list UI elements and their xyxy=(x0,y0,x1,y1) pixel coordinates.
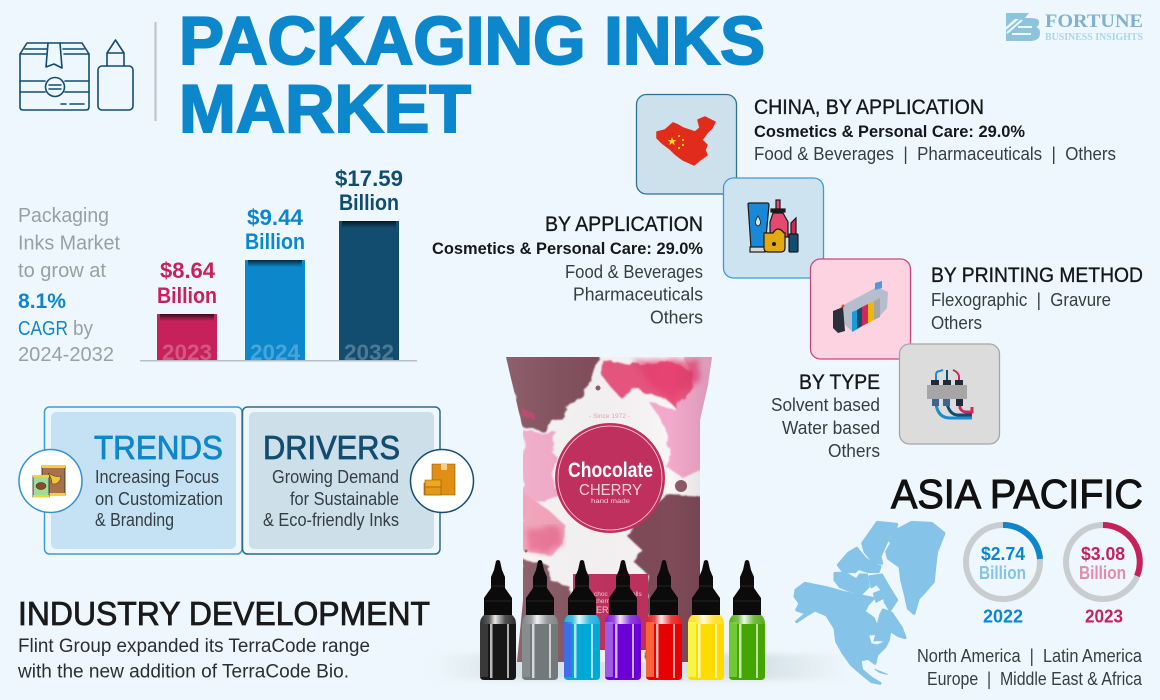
icon: cosmetics xyxy=(748,200,798,252)
bar: 2032: $17.59 xyxy=(335,166,403,191)
panel: trends xyxy=(44,407,242,554)
logo: Fortune Business Insights xyxy=(1006,11,1143,43)
title: PACKAGING INKS xyxy=(179,3,765,79)
icon: ink connectors xyxy=(927,370,972,418)
chart: donut 2023: Billion xyxy=(1079,562,1126,583)
text: trends description xyxy=(95,467,223,530)
card: China map xyxy=(636,94,736,194)
icon: printer xyxy=(833,281,888,333)
chart: donut 2023: 2023 xyxy=(1085,606,1123,626)
text: by printing method: Flexographic | Gravure xyxy=(931,290,1111,310)
text: by printing method: BY PRINTING METHOD xyxy=(931,264,1143,287)
bar: 2032: 2032 xyxy=(344,340,394,365)
icon: box and ink bottle xyxy=(20,40,133,110)
text block: CAGR statement: Inks Market xyxy=(18,232,120,254)
card: type xyxy=(900,344,1000,444)
bar: 2024 xyxy=(245,205,305,365)
text block: CAGR statement: Packaging xyxy=(18,205,109,227)
map: North America xyxy=(795,522,944,683)
text: drivers description: for Sustainable xyxy=(290,489,399,509)
bar: 2023: $8.64 xyxy=(160,258,216,283)
bar: 2024: $9.44 xyxy=(247,205,304,230)
text: by application: Pharmaceuticals xyxy=(573,284,703,304)
bar chart: market size xyxy=(140,166,417,365)
text: by type xyxy=(771,371,880,461)
text block: CAGR statement: by xyxy=(73,318,93,340)
illustration: ink bottles xyxy=(480,560,765,680)
text: other regions xyxy=(917,646,1143,689)
text block: CAGR statement: CAGR xyxy=(18,318,68,340)
bar: 2024: Billion xyxy=(245,229,305,254)
bar: 2023 xyxy=(157,258,217,365)
card: printing method xyxy=(810,259,910,359)
bar: 2032: Billion xyxy=(339,190,399,215)
chart: donut 2022: 2022 xyxy=(983,606,1023,626)
icon: snack packets xyxy=(19,450,82,512)
bottle: grey xyxy=(522,560,558,680)
title xyxy=(179,3,765,147)
text: China by application xyxy=(754,96,1116,164)
chart: donut 2022: $2.74 xyxy=(981,543,1026,564)
pack small print: cherry xyxy=(594,598,613,605)
card: cosmetics xyxy=(724,178,824,278)
bottle: black xyxy=(480,560,516,680)
bottle: red xyxy=(646,560,682,680)
pack small print: choc xyxy=(594,591,608,598)
bar: 2023: Billion xyxy=(157,283,217,308)
text: by application: Others xyxy=(650,308,703,328)
text: by printing method xyxy=(931,264,1143,333)
pack small print: ERM xyxy=(596,605,616,615)
panel: drivers xyxy=(242,407,440,554)
logo: Fortune Business Insights: BUSINESS INSIGHTS xyxy=(1045,32,1143,43)
text: by printing method: Others xyxy=(931,313,982,333)
text: China by application: CHINA, BY APPLICATION xyxy=(754,96,984,119)
pack label circle: Chocolate xyxy=(568,459,653,482)
heading: industry development: INDUSTRY DEVELOPMENT xyxy=(18,595,430,632)
text: by application xyxy=(432,213,703,328)
text: China by application: Cosmetics & Personal Care: 29.0% xyxy=(754,122,1025,141)
pack label circle xyxy=(555,423,665,533)
text: by type: Water based xyxy=(782,418,880,438)
text: by type: Solvent based xyxy=(771,395,880,415)
bar: 2032 xyxy=(335,166,403,365)
pack label circle: hand made xyxy=(591,498,630,505)
text block: CAGR statement: 2024-2032 xyxy=(18,344,114,366)
divider xyxy=(154,22,156,121)
text: industry development description: with the new addition of TerraCode Bio. xyxy=(17,662,349,682)
bottle: green xyxy=(729,560,765,680)
text: trends description: Increasing Focus xyxy=(95,467,219,487)
text: by application: Food & Beverages xyxy=(565,262,703,282)
illustration: chocolate cherry package xyxy=(506,357,712,662)
text: drivers description: & Eco-friendly Inks xyxy=(263,510,399,530)
text: industry development description xyxy=(17,636,370,682)
bottle: yellow xyxy=(688,560,724,680)
chart: donut 2023: $3.08 xyxy=(1081,543,1125,564)
text: other regions: North America | Latin America xyxy=(917,646,1143,666)
pack small print: alls xyxy=(632,591,643,598)
text: drivers description xyxy=(263,467,399,530)
text: industry development description: Flint Group expanded its TerraCode range xyxy=(18,636,370,657)
text: China by application: Food & Beverages | Pharmaceuticals | Others xyxy=(754,144,1116,164)
chart: donut 2022: Billion xyxy=(979,562,1026,583)
heading: drivers: DRIVERS xyxy=(263,429,400,466)
text: by type: Others xyxy=(828,441,880,461)
bottle: cyan xyxy=(564,560,600,680)
pack tagline: - Since 1972 - xyxy=(589,413,630,420)
text: by application: BY APPLICATION xyxy=(545,213,703,236)
bar: 2024: 2024 xyxy=(250,340,301,365)
text: drivers description: Growing Demand xyxy=(272,467,399,487)
floor shadow band xyxy=(430,654,850,680)
title: MARKET xyxy=(179,71,471,147)
text: by application: Cosmetics & Personal Care: 29.0% xyxy=(432,239,703,258)
text block: CAGR statement: to grow at xyxy=(18,260,106,282)
icon: China map xyxy=(657,117,715,165)
bottle: purple xyxy=(605,560,641,680)
text: trends description: on Customization xyxy=(95,489,223,509)
heading: trends: TRENDS xyxy=(94,429,223,466)
text: trends description: & Branding xyxy=(95,510,174,530)
bar: 2023: 2023 xyxy=(162,340,212,365)
chart: donut 2022 xyxy=(966,525,1040,626)
text block: CAGR statement xyxy=(18,205,120,366)
logo: Fortune Business Insights: FORTUNE xyxy=(1045,11,1143,32)
text block: CAGR statement: 8.1% xyxy=(18,290,66,313)
text: by type: BY TYPE xyxy=(799,371,880,394)
chart: donut 2023 xyxy=(1066,525,1140,626)
icon: cardboard boxes xyxy=(410,450,474,512)
pack label circle: CHERRY xyxy=(579,482,642,499)
heading: Asia Pacific: ASIA PACIFIC xyxy=(891,471,1143,517)
pack small print xyxy=(594,591,643,615)
